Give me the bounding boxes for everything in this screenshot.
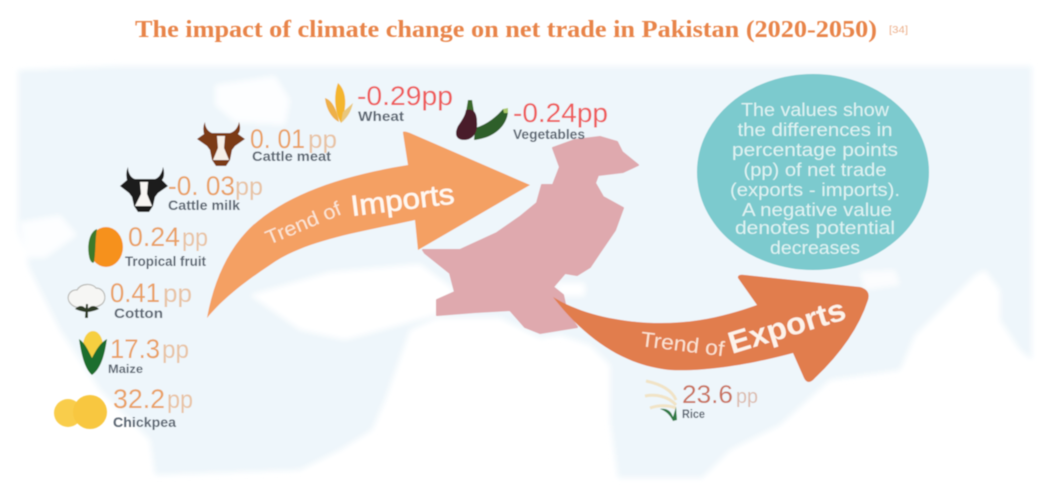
arrow: trend of exports <box>553 275 869 382</box>
item: chickpea: pp <box>167 386 193 414</box>
item: cotton: pp <box>163 280 192 308</box>
item: cattle meat: pp <box>308 126 337 154</box>
item: cotton <box>68 278 192 321</box>
item: maize: pp <box>162 336 189 364</box>
arrow: trend of imports: Trend of <box>262 198 345 250</box>
callout: explanation circle: (pp) of net trade <box>744 160 886 180</box>
item: tropical fruit: 0.24 <box>128 222 180 252</box>
item: tropical fruit <box>88 222 208 269</box>
title: [34] <box>889 25 908 36</box>
item: cotton: Cotton <box>114 305 163 321</box>
item: tropical fruit: pp <box>182 224 208 252</box>
item: rice: Rice <box>682 407 705 421</box>
item: wheat: -0.29pp <box>357 81 453 111</box>
item: maize: Maize <box>108 362 143 376</box>
item: vegetables <box>456 98 608 142</box>
item: chickpea: 32.2 <box>113 384 165 414</box>
item: rice <box>645 381 758 421</box>
icon: brown cow head <box>197 122 245 166</box>
item: cattle milk: pp <box>235 173 263 201</box>
callout: explanation circle: the differences in <box>738 120 892 140</box>
arrow: trend of imports: Imports <box>349 179 456 223</box>
item: wheat <box>325 81 453 124</box>
arrow: trend of exports: Exports <box>724 292 850 361</box>
callout: explanation circle: The values show <box>741 100 890 120</box>
item: chickpea <box>54 384 193 430</box>
item: chickpea: Chickpea <box>113 414 176 430</box>
item: rice: 23.6 <box>682 381 733 409</box>
item: vegetables: Vegetables <box>513 126 585 142</box>
item: wheat: Wheat <box>358 108 404 124</box>
item: maize <box>79 331 189 376</box>
icon: mango <box>88 227 123 267</box>
item: cotton: 0.41 <box>110 278 160 308</box>
item: vegetables: -0.24pp <box>513 98 608 128</box>
callout: explanation circle: (exports - imports). <box>730 180 900 200</box>
icon: eggplant and courgette <box>456 100 508 140</box>
map: Pakistan <box>423 137 638 333</box>
item: tropical fruit: Tropical fruit <box>125 253 206 269</box>
item: rice: pp <box>736 386 758 408</box>
item: cattle milk: Cattle milk <box>168 197 240 213</box>
icon: rice plant <box>645 381 677 421</box>
callout: explanation circle: denotes potential <box>735 218 895 238</box>
item: cattle meat: Cattle meat <box>252 148 331 164</box>
item: cattle meat <box>197 122 337 166</box>
callout: explanation circle: A negative value <box>742 200 892 220</box>
arrow: trend of imports <box>207 132 530 318</box>
icon: cotton boll <box>68 284 105 318</box>
title: The impact of climate change on net trade in Pakistan (2020-2050) <box>135 17 877 43</box>
callout: explanation circle <box>697 74 929 270</box>
icon: wheat ear <box>325 83 353 123</box>
callout: explanation circle: percentage points <box>732 140 898 160</box>
item: maize: 17.3 <box>110 334 160 364</box>
icon: black cow head <box>120 167 168 212</box>
item: cattle meat: 0. 01 <box>250 124 305 154</box>
item: cattle milk: -0. 03 <box>168 171 235 201</box>
item: cattle milk <box>120 167 263 213</box>
callout: explanation circle: decreases <box>770 238 860 258</box>
icon: corn cob <box>79 331 107 375</box>
icon: chickpeas <box>54 395 107 429</box>
arrow: trend of exports: Trend of <box>639 328 726 361</box>
